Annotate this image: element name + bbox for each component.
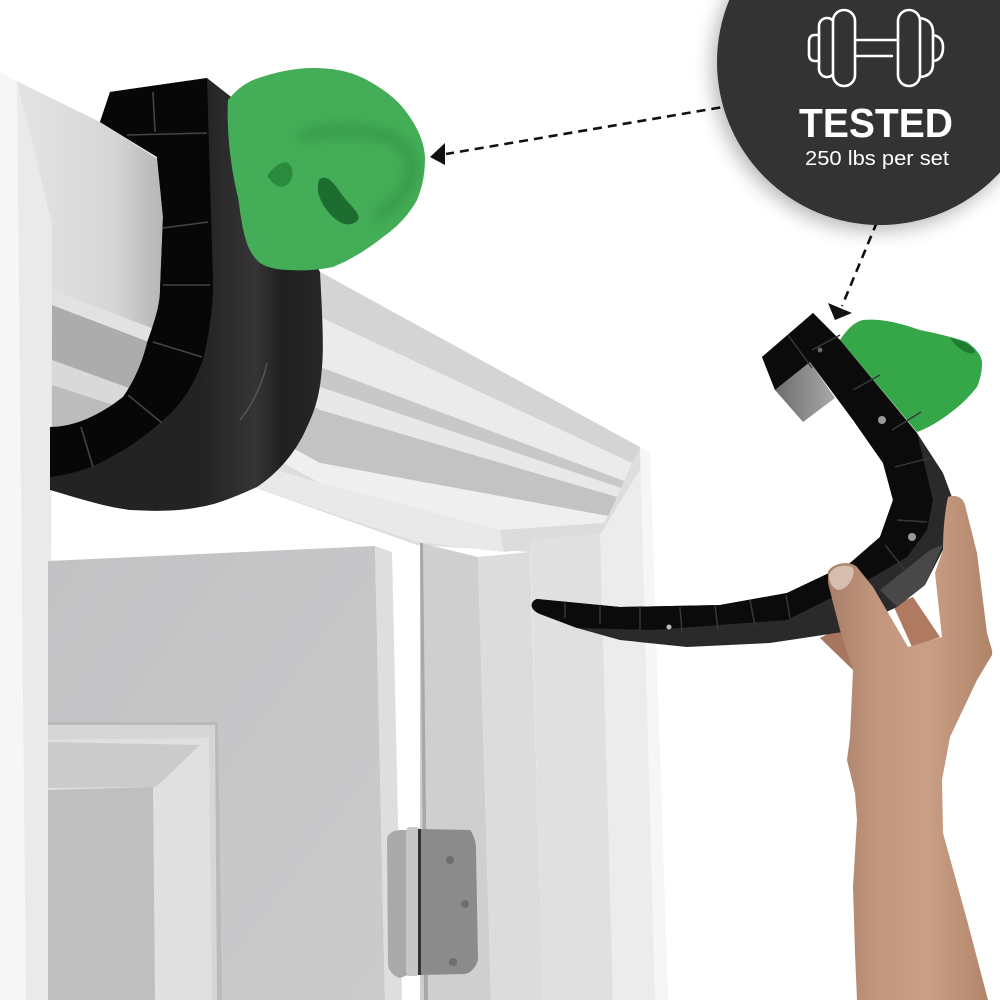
icon: dumbbell bbox=[809, 10, 943, 86]
dashed arrow to hold bbox=[430, 105, 735, 165]
flexing black hook held in hand bbox=[532, 313, 953, 647]
hand and arm bbox=[828, 496, 992, 1000]
dashed arrow to hook bbox=[828, 222, 877, 320]
hold finger pockets bbox=[267, 162, 292, 187]
hold groove shading bbox=[300, 131, 412, 217]
hook rib face bbox=[50, 78, 213, 477]
thumbnail bbox=[829, 566, 854, 590]
lower finger behind hook bbox=[820, 625, 870, 670]
green climbing hold in hand bbox=[840, 320, 982, 432]
green climbing hold on door bbox=[228, 68, 425, 270]
badge: tested bbox=[717, 0, 1000, 225]
badge shadow bbox=[713, 0, 1000, 230]
left jamb bbox=[0, 72, 52, 1000]
door panel bbox=[48, 546, 402, 1000]
hook strip highlight bbox=[880, 545, 943, 607]
door frame bbox=[0, 72, 668, 1000]
hook open box bbox=[775, 362, 835, 422]
icon: door hinge bbox=[387, 827, 478, 978]
hold dimple bbox=[950, 338, 975, 353]
badge subtitle: 250 lbs per set bbox=[805, 148, 949, 170]
black door hook on frame bbox=[50, 78, 323, 511]
recessed panel bbox=[48, 722, 222, 1000]
right jamb bbox=[420, 447, 668, 1000]
header beam bbox=[240, 228, 650, 552]
hook rib face bbox=[532, 313, 933, 630]
badge title: TESTED bbox=[799, 100, 953, 146]
header front face bbox=[0, 73, 175, 470]
index finger behind hook bbox=[893, 597, 940, 647]
